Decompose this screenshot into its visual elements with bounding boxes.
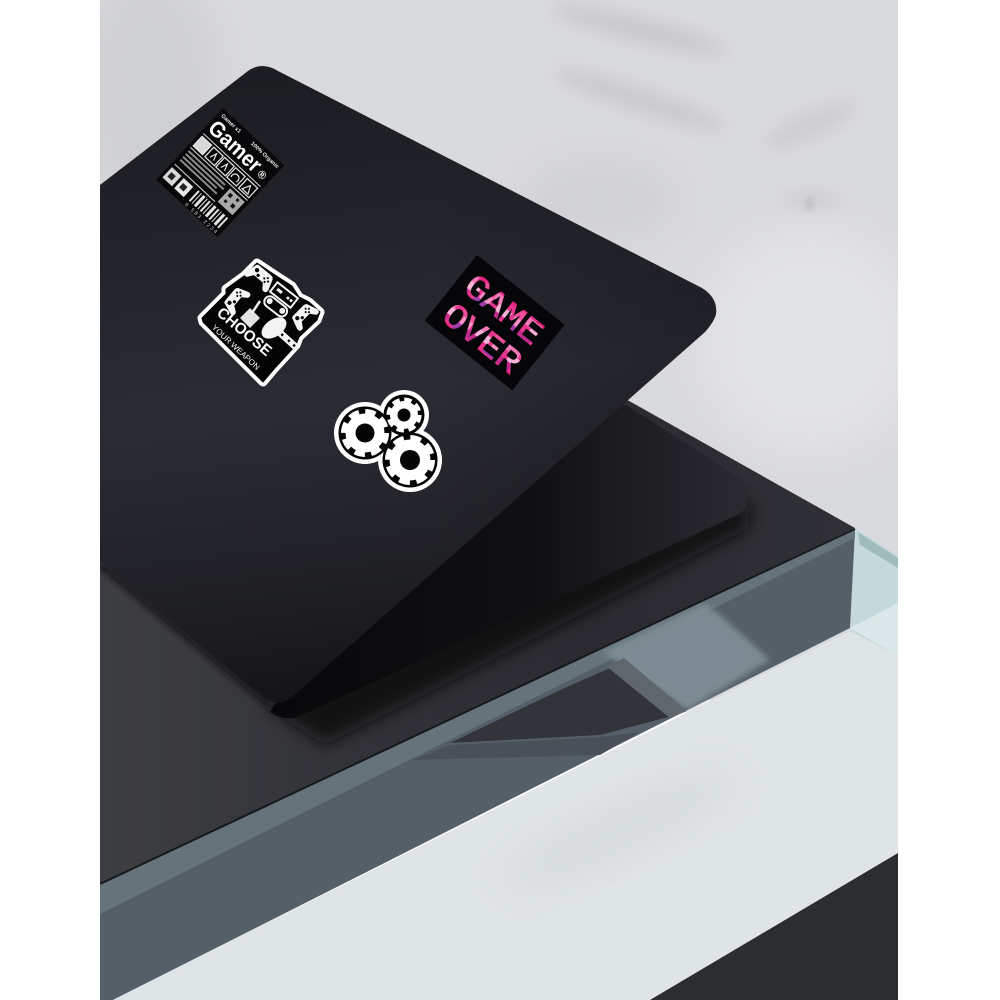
glass table clear corner [850,528,898,660]
laptop lid [100,66,716,703]
icon: retro gamepad [270,282,298,308]
label fine print [180,150,227,196]
glass front edge [100,530,855,1000]
gear right [388,438,432,482]
icon: left controller [224,288,250,316]
over text: OVER [433,296,529,384]
tabletop front edge line [100,529,855,884]
sticker: Gamer label: ® [254,168,269,182]
icon: top controller [244,264,273,292]
laptop base [270,398,748,718]
label pictograms [162,167,193,197]
laptop shadow [265,500,750,745]
sticker: gears [334,390,442,492]
game text: GAME [455,267,550,355]
label barcode: 6 583 2234 [183,202,218,235]
icon: joystick [240,301,260,328]
sticker: game over [425,255,565,390]
label title: Gamer [203,115,268,177]
sticker: Gamer label [155,108,284,238]
gear small [388,400,420,430]
glass edge highlight band [100,530,855,914]
product photo scene [100,0,898,1000]
marble surface [80,0,920,700]
sticker: Gamer label: 100% Organic [249,141,280,170]
dark tabletop [100,393,855,884]
icon: right controller [292,304,319,331]
icon: round gamepad [263,295,288,318]
label QR code [218,188,245,215]
gear left [344,412,386,454]
lid edge shadow [100,565,270,706]
glass light patch [603,604,770,710]
sticker black body [202,263,320,382]
icon: mouse [262,317,286,339]
dark reflection [450,668,672,743]
lower marble [113,631,898,1000]
dark lower right floor [650,853,898,1000]
weapon caption: YOUR WEAPON [210,323,262,372]
choose caption: CHOOSE [213,304,275,360]
glass grey strip [606,658,687,718]
icon: remote [278,331,300,351]
label icons [193,136,258,198]
label small header: Gamer x1 [219,113,242,135]
sticker: choose your weapon [202,261,320,382]
sticker white outline [202,263,320,382]
